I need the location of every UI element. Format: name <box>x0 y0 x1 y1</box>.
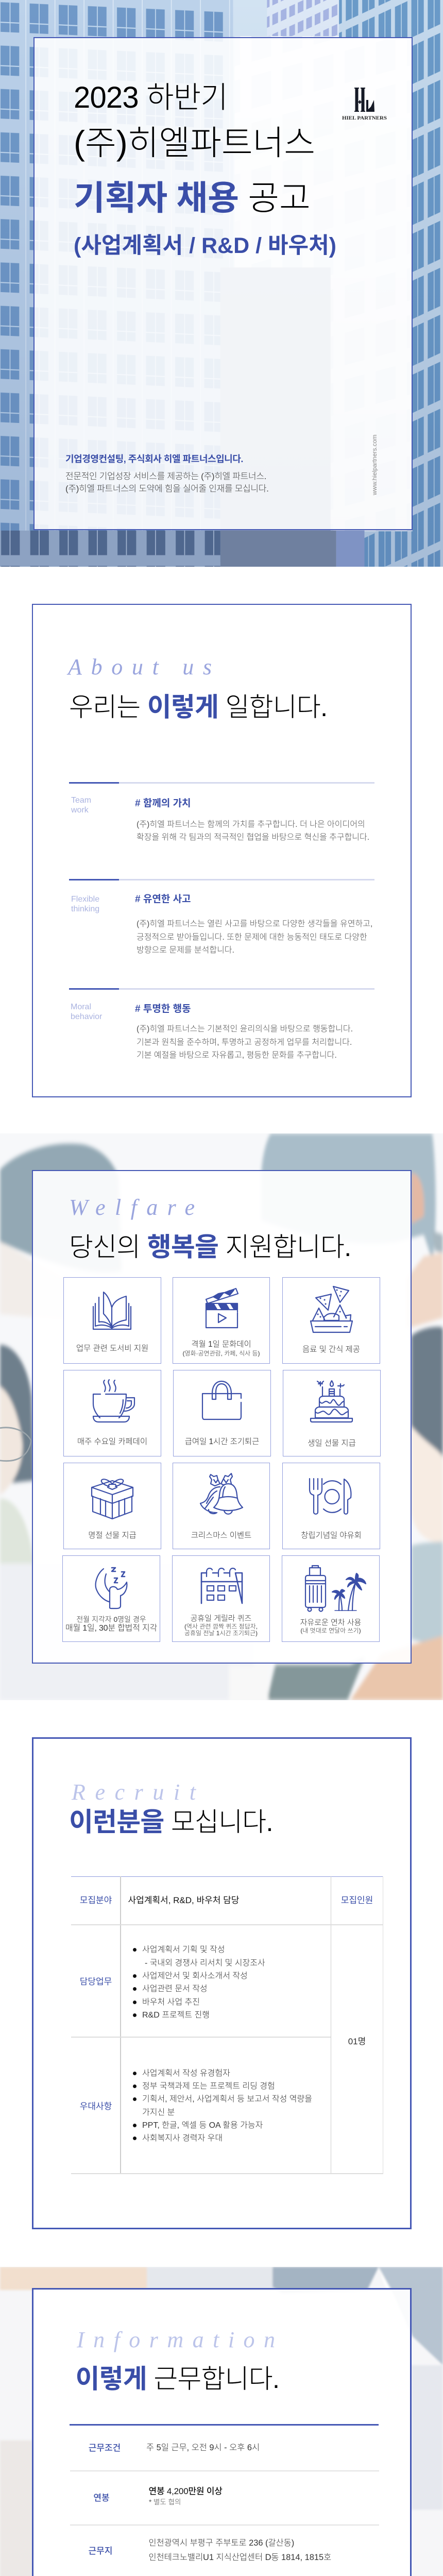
text: moral behavior description: 기본 예절을 바탕으로 자유롭고, 평등한 문화를 추구합니다. <box>137 1051 337 1060</box>
label: 음료 및 간식 제공 <box>302 1345 360 1354</box>
value: address <box>148 2536 331 2565</box>
label: 업무 관련 도서비 지원 <box>76 1344 148 1353</box>
heading: 이렇게 근무합니다. <box>75 2364 279 2394</box>
label: 매주 수요일 카페데이 <box>77 1437 147 1446</box>
card: book allowance <box>63 1277 161 1364</box>
list: duties: R&D 프로젝트 진행 <box>142 2011 210 2020</box>
table header: duties: 담당업무 <box>80 1976 112 1987</box>
text: intro body: 전문적인 기업성장 서비스를 제공하는 (주)히엘 파트너스. <box>65 471 266 481</box>
list: duties: 바우처 사업 추진 <box>142 1998 200 2007</box>
icon: plate with fork and knife <box>309 1478 352 1515</box>
label: 창립기념일 야유회 <box>301 1531 362 1540</box>
list: duties: 사업관련 문서 작성 <box>142 1985 208 1993</box>
title: planner recruitment notice: 기획자 채용 공고 <box>74 179 311 217</box>
card: snacks <box>282 1277 380 1364</box>
label: Moral behavior: Moral <box>71 1003 91 1011</box>
table value: headcount: 01명 <box>348 2036 366 2046</box>
icon: gift box <box>91 1479 134 1520</box>
label: Flexible thinking: Flexible <box>71 895 99 904</box>
card: guerrilla quiz <box>172 1555 270 1642</box>
row: flexible thinking <box>69 879 374 955</box>
section: information <box>0 2267 443 2576</box>
label: 급여일 1시간 조기퇴근 <box>185 1437 259 1446</box>
heading: 우리는 이렇게 일합니다. <box>69 692 327 722</box>
row: location <box>33 2532 410 2573</box>
icon: HIEL PARTNERS logo: HIEL PARTNERS <box>342 116 387 121</box>
text: intro headline: 기업경영컨설팅, 주식회사 히엘 파트너스입니다. <box>65 454 243 464</box>
text: flexible thinking description: 방향으로 문제를 분석합니다. <box>137 946 234 955</box>
card: payday leave <box>173 1370 271 1456</box>
subheading: value of togetherness: # 함께의 가치 <box>135 798 191 809</box>
sublabel: 공휴일 전날 1시간 조기퇴근) <box>184 1630 258 1637</box>
section: recruit <box>32 1737 412 2229</box>
section: about us <box>32 604 412 1097</box>
label: 격월 1일 문화데이 <box>191 1340 251 1349</box>
icon: HIEL PARTNERS logo <box>342 88 387 121</box>
title: company name: (주)히엘파트너스 <box>74 124 315 162</box>
icon: christmas bells <box>200 1472 243 1515</box>
heading: 당신의 행복을 지원합니다. <box>69 1232 351 1262</box>
list: preferred qualifications: 기획서, 제안서, 사업계획서 등 보고서 작성 역량을 <box>142 2095 312 2104</box>
text: flexible thinking description <box>137 919 372 955</box>
text: intro body <box>65 471 269 494</box>
label: Flexible thinking <box>71 895 99 913</box>
card: free annual leave <box>282 1555 380 1642</box>
list: preferred qualifications: 사회복지사 경력자 우대 <box>142 2134 223 2143</box>
sublabel: (내 멋대로 연달아 쓰기) <box>300 1627 361 1634</box>
card: holiday gift <box>63 1463 161 1549</box>
icon: luggage and palm trees <box>305 1565 367 1612</box>
background photo: smiling coworkers <box>0 1133 443 1700</box>
label: 명절 선물 지급 <box>88 1531 137 1540</box>
value: address: 인천광역시 부평구 주부토로 236 (갈산동) <box>148 2538 294 2548</box>
subtitle: job areas: (사업계획서 / R&D / 바우처) <box>74 233 336 258</box>
icon: sleeping moon <box>95 1567 128 1609</box>
row: team work <box>69 782 374 842</box>
table value: field: 사업계획서, R&D, 바우처 담당 <box>128 1895 239 1905</box>
row: location: 근무지 <box>89 2546 112 2555</box>
row: salary <box>33 2475 410 2521</box>
text: intro body: (주)히엘 파트너스의 도약에 힘을 실어줄 인재를 모십니다. <box>65 484 269 494</box>
card: late pass <box>62 1555 160 1642</box>
background photo: glass office buildings <box>0 0 443 567</box>
table: recruitment details <box>71 1876 383 2174</box>
label: Moral behavior <box>71 1003 102 1021</box>
list: preferred qualifications: 사업계획서 작성 유경험자 <box>142 2069 230 2078</box>
label: Team work <box>71 796 91 814</box>
label: 전월 지각자 0명일 경우 <box>76 1615 146 1623</box>
icon: movie clapperboard <box>205 1288 239 1328</box>
panel: recruit <box>32 1737 412 2229</box>
icon: nachos bowl <box>310 1286 353 1333</box>
row: moral behavior <box>69 988 374 1060</box>
table header: headcount: 모집인원 <box>341 1895 373 1905</box>
label: 공휴일 게릴라 퀴즈 <box>191 1614 251 1623</box>
section: welfare <box>0 1133 443 1700</box>
section: hero <box>0 0 443 567</box>
label: 크리스마스 이벤트 <box>191 1531 251 1540</box>
list: duties: 사업제안서 및 회사소개서 작성 <box>142 1972 248 1980</box>
row: work conditions: 근무조건 <box>89 2443 121 2452</box>
panel: welfare <box>32 1170 412 1664</box>
row: work conditions <box>33 2434 410 2465</box>
script heading: Welfare: Welfare <box>69 1195 195 1220</box>
text: moral behavior description: (주)히엘 파트너스는 기본적인 윤리의식을 바탕으로 행동합니다. <box>137 1025 353 1033</box>
script heading: Recruit: Recruit <box>71 1780 197 1805</box>
text: moral behavior description <box>137 1024 353 1060</box>
value: salary note: * 별도 협의 <box>149 2498 181 2506</box>
panel: information <box>32 2288 412 2576</box>
list: duties: - 국내외 경쟁사 리서치 및 시장조사 <box>145 1959 265 1968</box>
card: cafe day <box>63 1370 161 1456</box>
text: website vertical: www.hielpartners.com <box>371 435 378 495</box>
label: Moral behavior: behavior <box>71 1012 102 1021</box>
label: Flexible thinking: thinking <box>71 905 99 913</box>
icon: open book <box>93 1291 132 1330</box>
value: work hours: 주 5일 근무, 오전 9시 - 오후 6시 <box>146 2443 260 2452</box>
panel: hero card <box>33 37 413 530</box>
heading: 이런분을 모십니다. <box>69 1807 273 1837</box>
sublabel: (영화·공연관람, 카페, 식사 등) <box>182 1350 260 1357</box>
text: flexible thinking description: (주)히엘 파트너스는 열린 사고를 바탕으로 다양한 생각들을 유연하고, <box>137 920 372 928</box>
text: team work description: 확장을 위해 각 팀과의 적극적인 협업을 바탕으로 혁신을 추구합니다. <box>137 833 369 842</box>
text: moral behavior description: 기본과 원칙을 준수하며, 투명하고 공정하게 업무를 처리합니다. <box>137 1038 352 1047</box>
list: preferred qualifications: 가지신 분 <box>142 2108 175 2117</box>
label: 자유로운 연차 사용 <box>300 1618 361 1627</box>
label: Team work: Team <box>71 796 91 805</box>
table header: preferred: 우대사항 <box>80 2101 112 2111</box>
subheading: transparent conduct: # 투명한 행동 <box>135 1004 191 1014</box>
icon: coffee cup <box>93 1379 135 1423</box>
list: preferred qualifications <box>133 2069 312 2143</box>
background photo: desk with papers and pencil <box>0 2267 443 2576</box>
text: team work description <box>137 820 369 842</box>
text: team work description: (주)히엘 파트너스는 함께의 가치를 추구합니다. 더 나은 아이디어의 <box>137 820 365 829</box>
icon: calendar <box>201 1567 243 1604</box>
label: 생일 선물 지급 <box>308 1439 356 1448</box>
sublabel: 매월 1일, 30분 합법적 지각 <box>65 1624 157 1633</box>
list: preferred qualifications: 정부 국책과제 또는 프로젝트 리딩 경험 <box>142 2082 275 2091</box>
list: preferred qualifications: PPT, 한글, 엑셀 등 OA 활용 가능자 <box>142 2121 263 2130</box>
list: duties: 사업계획서 기획 및 작성 <box>142 1945 225 1954</box>
script heading: Information: Information <box>76 2327 275 2352</box>
value: address: 인천테크노밸리U1 지식산업센터 D동 1814, 1815호 <box>148 2553 331 2562</box>
card: birthday <box>283 1370 381 1456</box>
icon: tote bag <box>202 1381 242 1420</box>
text: flexible thinking description: 긍정적으로 받아들입니다. 또한 문제에 대한 능동적인 태도로 다양한 <box>137 933 367 942</box>
value: salary amount: 연봉 4,200만원 이상 <box>148 2486 223 2496</box>
script heading: About us: About us <box>66 654 212 680</box>
card: anniversary outing <box>282 1463 380 1549</box>
sublabel: (역사 관련 깜짝 퀴즈 정답자, <box>184 1623 258 1630</box>
table header: field: 모집분야 <box>80 1895 112 1905</box>
label: Team work: work <box>71 806 89 814</box>
list: duties <box>133 1945 265 2020</box>
subheading: flexible thinking: # 유연한 사고 <box>135 893 191 905</box>
panel: about us <box>32 604 412 1097</box>
card: culture day <box>173 1277 270 1364</box>
row: salary: 연봉 <box>93 2493 110 2503</box>
icon: birthday cake <box>310 1380 353 1423</box>
card: christmas event <box>173 1463 270 1549</box>
title: 2023 second half: 2023 하반기 <box>74 81 228 114</box>
